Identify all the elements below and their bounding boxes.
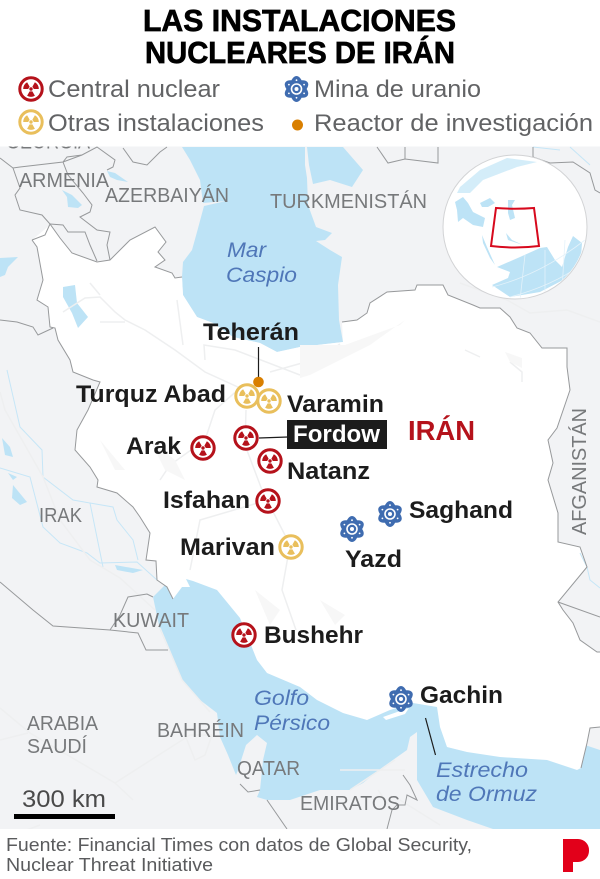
- legend item: reactor de investigación: Reactor de investigación: [314, 110, 593, 137]
- country label: Arabia Saudí: SAUDÍ: [27, 735, 87, 758]
- country label: Afganistán: AFGANISTÁN: [568, 408, 591, 535]
- leader line: Ormuz: [426, 718, 436, 755]
- country label: Turkmenistán: TURKMENISTÁN: [270, 190, 427, 213]
- sea label: Golfo Pérsico: Pérsico: [254, 712, 330, 735]
- site: Natanz: Natanz: [287, 458, 370, 485]
- sea label: Mar Caspio: Caspio: [226, 264, 297, 287]
- site: Isfahan: Isfahan: [163, 487, 250, 514]
- country label: Arabia Saudí: ARABIA: [27, 713, 99, 735]
- Iran territory: [32, 225, 600, 770]
- scale bar: 300 km: [22, 786, 106, 813]
- legend item: central nuclear: Central nuclear: [48, 76, 220, 103]
- site: Arak: Arak: [126, 433, 182, 460]
- site: Saghand: Saghand: [409, 497, 513, 524]
- country label: Bahréin: BAHRÉIN: [157, 719, 244, 742]
- sea label: Mar Caspio: [227, 242, 296, 286]
- site: Bushehr: Bushehr: [264, 622, 363, 649]
- Qeshm island: [383, 708, 409, 720]
- sea: Caspian: [182, 147, 343, 352]
- roads and relief: [42, 282, 523, 790]
- scale bar: [14, 790, 115, 819]
- borders: [0, 147, 600, 829]
- sea: Kara-Bogaz: [307, 147, 363, 187]
- site: Teherán: [203, 319, 299, 387]
- country label: Armenia: ARMENIA: [19, 170, 110, 192]
- site: Yazd: Yazd: [345, 546, 402, 573]
- rivers: [0, 147, 600, 588]
- legend item: otras instalaciones: Otras instalaciones: [48, 110, 264, 137]
- country label: Qatar: QATAR: [237, 758, 300, 780]
- site: Teherán: Teherán: [203, 319, 299, 346]
- site: Gachin: Gachin: [420, 682, 503, 709]
- logo: [563, 839, 589, 872]
- source note: Fuente: Financial Times con datos de Global Security,: [6, 835, 472, 855]
- country label: Georgia: GEORGIA: [6, 132, 91, 154]
- sea label: Estrecho de Ormuz: Estrecho: [436, 759, 528, 782]
- site: Fordow: Fordow: [293, 421, 380, 448]
- sea label: Golfo Pérsico: Golfo: [254, 687, 309, 710]
- country label: Emiratos: EMIRATOS: [300, 793, 400, 815]
- sea label: Golfo Pérsico: [254, 690, 330, 730]
- site: Marivan: Marivan: [180, 534, 275, 561]
- site: Natanz: [257, 448, 370, 479]
- title: LAS INSTALACIONES: [143, 3, 456, 38]
- legend item: mina de uranio: Mina de uranio: [314, 76, 481, 103]
- sea label: Estrecho de Ormuz: de Ormuz: [436, 783, 538, 806]
- sea label: Estrecho de Ormuz: [436, 762, 537, 801]
- country label: Irán: IRÁN: [408, 415, 475, 446]
- title: NUCLEARES DE IRÁN: [145, 35, 455, 70]
- site: Varamin: Varamin: [287, 391, 384, 418]
- sea: Persian Gulf and Gulf of Oman: [153, 570, 600, 829]
- country label: Azerbaiyán: AZERBAIYÁN: [105, 184, 229, 207]
- country label: Kuwait: KUWAIT: [113, 610, 189, 632]
- country label: Arabia Saudí: [27, 716, 98, 753]
- locator globe: [443, 155, 587, 300]
- site: Turquz Abad: Turquz Abad: [76, 381, 226, 408]
- site: Saghand: [378, 500, 512, 527]
- title: [143, 3, 456, 70]
- country label: Irak: IRAK: [39, 505, 83, 527]
- site: Arak: [126, 433, 214, 460]
- lakes: [0, 171, 143, 573]
- source note: Nuclear Threat Initiative: [6, 855, 213, 875]
- legend: [20, 76, 593, 137]
- sea label: Mar Caspio: Mar: [227, 239, 267, 262]
- site: Yazd: [340, 516, 400, 567]
- site: Gachin: [389, 686, 502, 712]
- site: Fordow: [235, 420, 387, 449]
- source note: [6, 835, 472, 875]
